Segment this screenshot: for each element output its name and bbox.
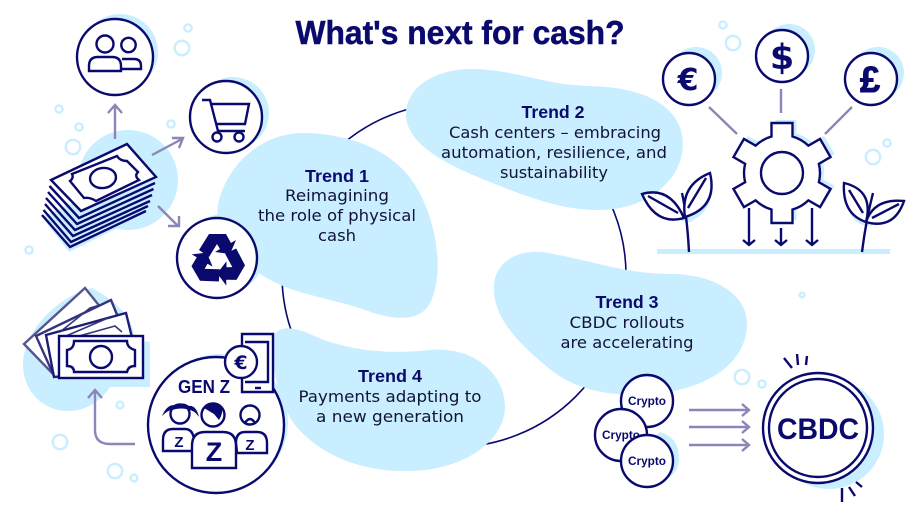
icon: gear — [733, 120, 835, 223]
panel: trend 4: Trend 4 — [358, 366, 422, 386]
text: GEN Z: GEN Z — [178, 377, 230, 397]
panel: trend 2: Trend 2 — [522, 102, 585, 122]
icon: crypto coins: Crypto — [628, 396, 666, 408]
arrow: cash to cart — [152, 138, 183, 155]
icon: left plant — [642, 173, 712, 252]
icon: CBDC coin — [763, 373, 884, 489]
icon: people — [77, 14, 158, 95]
panel: trend 2: automation, resilience, and — [441, 143, 667, 162]
arrows: crypto to CBDC — [689, 404, 749, 451]
icon: right plant — [844, 183, 904, 252]
icon: euro coin — [663, 47, 722, 105]
icon: crypto coins: Crypto — [602, 430, 640, 442]
icon: euro coin: € — [677, 63, 698, 98]
figures — [162, 404, 267, 468]
icon: CBDC coin: CBDC — [777, 413, 859, 446]
arrow: cash to people — [108, 105, 122, 139]
panel: trend 1: Reimagining — [285, 186, 389, 205]
ground line — [657, 249, 890, 254]
panel: trend 1: Trend 1 — [305, 166, 369, 186]
icon: phone: € — [233, 352, 248, 374]
figures: Z — [206, 437, 222, 467]
panel: trend 3: are accelerating — [560, 333, 694, 352]
panel: trend 3: CBDC rollouts — [570, 313, 684, 332]
down arrows under gear — [743, 208, 818, 245]
panel: trend 2: Cash centers – embracing — [449, 123, 661, 142]
icon: Gen Z group — [148, 334, 288, 493]
panel: trend 3: Trend 3 — [596, 292, 659, 312]
panel: trend 1: the role of physical — [258, 206, 416, 225]
figures: Z — [174, 434, 184, 451]
icon: pound coin — [845, 47, 904, 105]
panel: trend 2: sustainability — [500, 163, 608, 182]
icon: cash fan — [23, 288, 150, 411]
icon: dollar coin — [756, 24, 815, 82]
connecting ring — [282, 103, 626, 447]
icon: pound coin: £ — [860, 59, 880, 100]
panel: trend 1 — [217, 133, 438, 318]
arrow: cash to recycling — [158, 206, 179, 226]
figures: Z — [245, 437, 255, 454]
icon: recycling — [177, 214, 264, 298]
icon: phone — [225, 334, 273, 392]
panel: trend 4: a new generation — [316, 407, 464, 426]
panel: trend 2 — [406, 69, 683, 210]
CBDC rays — [784, 354, 862, 502]
title: What's next for cash? — [296, 14, 624, 51]
icon: crypto coins: Crypto — [628, 456, 666, 468]
arrow: Gen Z to cash — [88, 390, 135, 444]
panel: trend 1: cash — [318, 226, 356, 245]
icon: dollar coin: $ — [770, 38, 794, 78]
icon: crypto coins — [595, 375, 679, 487]
connector lines: coins to gear — [709, 89, 852, 134]
panel: trend 3 — [494, 252, 747, 395]
icon: shopping cart — [190, 77, 269, 153]
icon: cash stack — [42, 130, 178, 252]
panel: trend 4: Payments adapting to — [298, 387, 482, 406]
panel: trend 4 — [272, 328, 505, 471]
